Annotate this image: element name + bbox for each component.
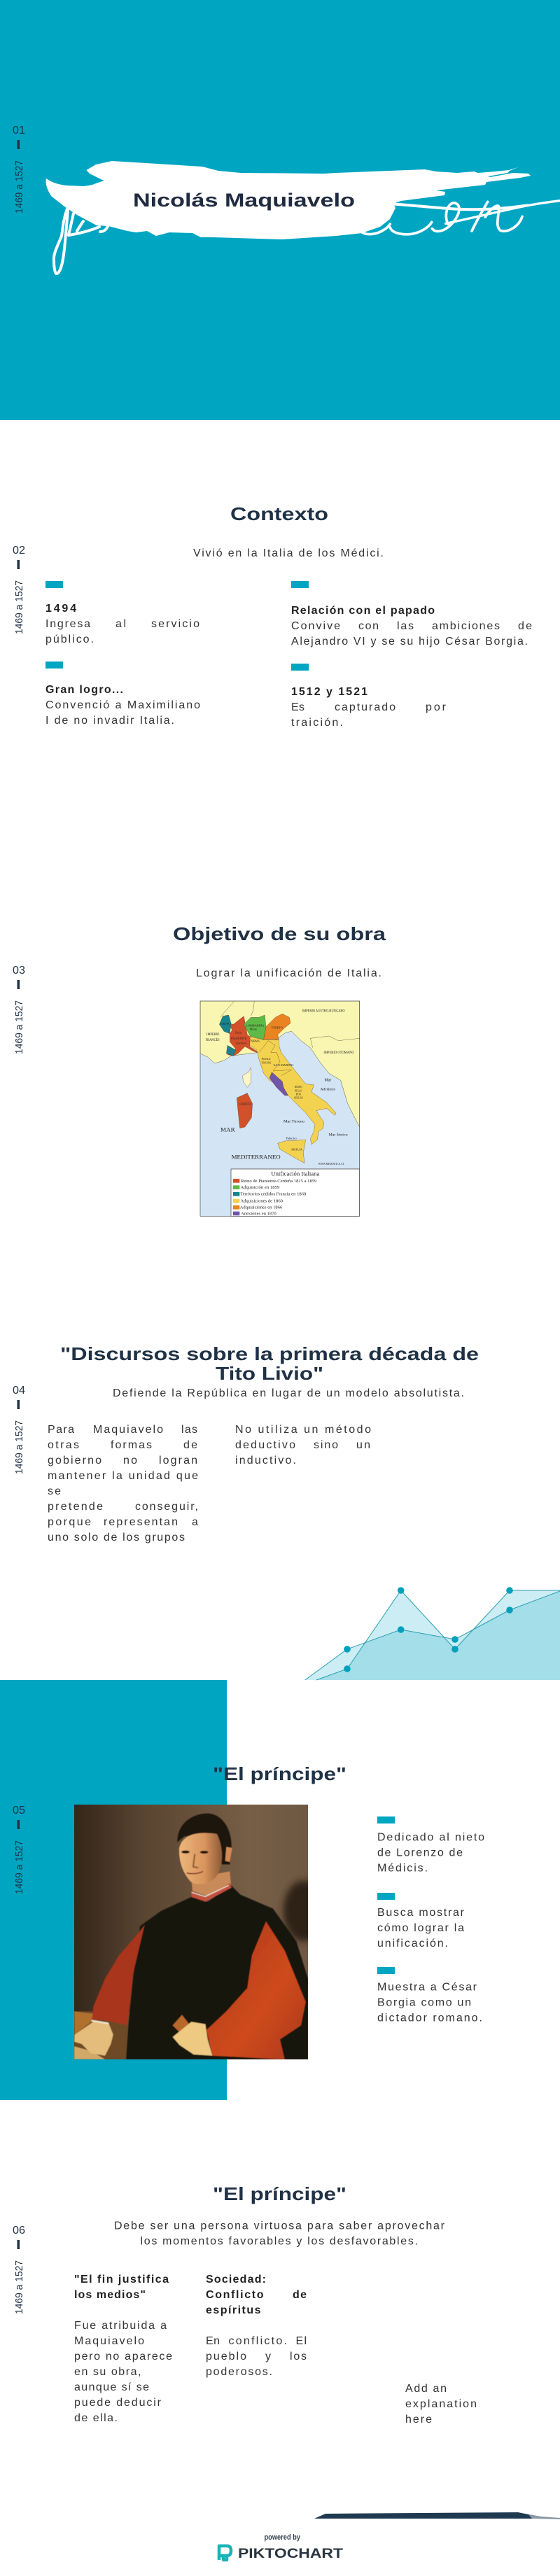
heading: "Discursos sobre la primera década de (60, 1343, 479, 1364)
text block left: formas (111, 1439, 152, 1451)
heading: Contexto (230, 503, 328, 524)
sidebar label 03 (13, 965, 25, 1054)
map labels: WWW.MEDIATICA.CL (318, 1162, 344, 1166)
item: 1494: público. (46, 634, 94, 645)
item: 1512 y 1521: 1512 y 1521 (291, 686, 368, 698)
text block left: no (123, 1455, 137, 1466)
column: el fin justifica los medios: puede deducir (74, 2397, 162, 2409)
item: 1512 y 1521: por (426, 701, 447, 713)
item: gran logro (46, 662, 200, 727)
heading: Tito Livio" (216, 1363, 323, 1384)
sidebar label 05: 05 (13, 1805, 25, 1816)
sidebar label 01 (13, 125, 25, 214)
map legend: Reino de Piamonte-Cerdeña 1815 a 1859 (241, 1179, 316, 1184)
placeholder text: explanation (405, 2398, 477, 2410)
text block left: porque (48, 1516, 91, 1528)
panel: objetivo de su obra (13, 923, 386, 1216)
column: sociedad: conflicto. (228, 2335, 287, 2347)
sidebar label 04 (13, 1385, 25, 1474)
map labels: SICILIAS (294, 1096, 303, 1100)
map labels: SABOYA (220, 1022, 230, 1026)
area chart (305, 1587, 560, 1680)
map labels: Palermo (286, 1136, 297, 1140)
item: 1512 y 1521: Es (291, 701, 304, 713)
black tunic (126, 1885, 308, 2059)
map labels: Adriático (320, 1088, 336, 1091)
text block right: sino (314, 1439, 338, 1451)
panel: el principe (13, 1763, 484, 2059)
item: muestra a cesar (377, 1967, 482, 2024)
right hand (173, 2022, 212, 2056)
text block right (235, 1424, 371, 1466)
text block left: las (181, 1424, 197, 1436)
item: relacion con el papado (291, 581, 532, 648)
text block left: Para (48, 1424, 74, 1436)
map labels: VENETO (271, 1026, 283, 1030)
map labels: REINO (295, 1085, 302, 1088)
item: muestra a cesar: Muestra a César (377, 1981, 477, 1994)
portrait of Machiavelli (74, 1805, 323, 2059)
item: relacion con el papado: Alejandro VI y se su hijo César Borgia. (291, 636, 528, 648)
column: el fin justifica los medios: Fue atribuida a (74, 2320, 167, 2332)
sidebar label 04: 04 (13, 1385, 25, 1396)
left sleeve (92, 1925, 145, 2025)
column: el fin justifica los medios (74, 2274, 172, 2424)
text block left: Maquiavelo (93, 1424, 163, 1436)
heading: "El príncipe" (213, 2183, 346, 2204)
logo icon (219, 2546, 231, 2560)
column: sociedad: poderosos. (206, 2366, 272, 2378)
sidebar label 01: 1469 a 1527 (13, 160, 25, 214)
text block left: a (192, 1516, 198, 1528)
item: dedicado (377, 1816, 484, 1875)
map legend: Territorios cedidos Francia en 1860 (240, 1192, 306, 1197)
item: dedicado: de Lorenzo de (377, 1847, 463, 1859)
text block left: de (183, 1439, 197, 1451)
map legend (231, 1169, 360, 1216)
column: sociedad: En (206, 2335, 220, 2347)
map labels: SICILIA (291, 1147, 303, 1151)
map labels: MAR (220, 1126, 235, 1133)
title text: Nicolás Maquiavelo (133, 190, 355, 211)
sidebar label 06: 06 (13, 2225, 25, 2236)
item: 1494: servicio (151, 618, 200, 630)
item: 1494 (46, 581, 200, 645)
item: 1512 y 1521 (291, 664, 447, 729)
intro text: Lograr la unificación de Italia. (196, 967, 382, 979)
panel: contexto (13, 503, 532, 729)
heading: "El príncipe" (213, 1763, 346, 1784)
column: el fin justifica los medios: aunque sí se (74, 2381, 149, 2393)
column: sociedad (206, 2274, 307, 2378)
map labels: PIAMONTE (231, 1037, 247, 1040)
map labels: SAN MARINO (274, 1063, 293, 1067)
map legend: Unificación Italiana (271, 1170, 320, 1177)
map labels: IMPERIO AUSTRO-HUNGARO (302, 1010, 345, 1014)
map legend: Adquisición en 1859 (240, 1185, 279, 1190)
sidebar label 04: 1469 a 1527 (13, 1420, 25, 1474)
sidebar label 02: 1469 a 1527 (13, 580, 25, 634)
panel: el principe 2 (13, 2183, 477, 2426)
text block right: un (356, 1439, 370, 1451)
map labels: DE LAS (295, 1088, 302, 1092)
map labels: DOS (296, 1092, 301, 1096)
right sleeve (206, 1921, 306, 2059)
book (173, 2015, 190, 2032)
item: 1512 y 1521: traición. (291, 717, 343, 729)
item: relacion con el papado: de (518, 620, 532, 632)
column: sociedad: Sociedad: (206, 2274, 266, 2286)
column: sociedad: los (290, 2351, 307, 2362)
map of Italian unification (200, 1001, 360, 1216)
map labels: LOMBARDIA (246, 1024, 265, 1028)
table (74, 2011, 130, 2059)
item: gran logro: Gran logro... (46, 684, 123, 696)
text block left: uno solo de los grupos (48, 1532, 185, 1544)
script swash right (362, 201, 560, 234)
script swash left (54, 209, 108, 274)
column: el fin justifica los medios: en su obra, (74, 2366, 141, 2378)
column: sociedad: El (295, 2335, 307, 2347)
map labels: Genova (236, 1041, 246, 1044)
sidebar label 03: 1469 a 1527 (13, 1000, 25, 1054)
column: sociedad: de (293, 2289, 307, 2301)
text block left: conseguir, (135, 1501, 198, 1513)
map labels: CERDEÑA (239, 1102, 251, 1106)
item: muestra a cesar: Borgia como un (377, 1996, 471, 2009)
item: muestra a cesar: dictador romano. (377, 2012, 482, 2024)
intro text: Defiende la República en lugar de un modelo absolutista. (113, 1387, 464, 1399)
map labels: TOSCANA (261, 1060, 272, 1064)
panel: discursos (13, 1343, 479, 1544)
hair (177, 1814, 232, 1864)
text block left: representan (104, 1516, 178, 1528)
heading: Objetivo de su obra (173, 923, 386, 944)
item: 1494: al (115, 618, 126, 630)
sidebar label 05 (13, 1805, 25, 1894)
column: el fin justifica los medios: "El fin justifica (74, 2274, 169, 2286)
heading (60, 1343, 479, 1384)
map labels: IMPERIO OTOMANO (323, 1051, 354, 1055)
map legend: Anexiones en 1870 (241, 1211, 276, 1216)
map legend: Adquisiciones en 1866 (240, 1205, 282, 1210)
item: relacion con el papado: ambiciones (432, 620, 500, 632)
item: relacion con el papado: Relación con el papado (291, 605, 435, 617)
footer: powered by: powered by (265, 2533, 301, 2542)
intro text: Vivió en la Italia de los Médici. (193, 547, 384, 559)
column: el fin justifica los medios: Maquiavelo (74, 2335, 144, 2347)
item: busca mostrar (377, 1893, 465, 1949)
map labels: FRANCÉS (206, 1038, 220, 1042)
map labels: PARMA (251, 1039, 260, 1042)
placeholder text: here (405, 2414, 432, 2426)
map labels: Mar Tirreno (284, 1119, 304, 1124)
logo wordmark: PIKTOCHART (238, 2547, 343, 2561)
sidebar label 01: 01 (13, 125, 25, 136)
placeholder text: Add an (405, 2383, 447, 2395)
map labels: Turin (235, 1031, 242, 1035)
column: sociedad: espíritus (206, 2304, 261, 2316)
text block right: deductivo (235, 1439, 295, 1451)
item: dedicado: Dedicado al nieto (377, 1831, 484, 1844)
map labels (206, 1010, 354, 1166)
item: relacion con el papado: las (397, 620, 414, 632)
intro text: Debe ser una persona virtuosa para saber aprovechar (114, 2220, 445, 2232)
text block right: inductivo. (235, 1455, 296, 1466)
sidebar label 02: 02 (13, 545, 25, 556)
text block left: se (48, 1485, 61, 1497)
item: relacion con el papado: Convive (291, 620, 340, 632)
text block left: logran (159, 1455, 197, 1466)
text block left: mantener la unidad que (48, 1470, 198, 1482)
column: sociedad: pueblo (206, 2351, 246, 2362)
text block left: pretende (48, 1501, 103, 1513)
item: relacion con el papado: con (358, 620, 379, 632)
item: gran logro: Convenció a Maximiliano (46, 699, 200, 711)
title artwork: white brush stroke with script swash (46, 161, 560, 274)
item: dedicado: Médicis. (377, 1862, 428, 1875)
text block left (48, 1424, 198, 1544)
column: sociedad: Conflicto (206, 2289, 264, 2301)
map legend: Adquisiciones de 1860 (240, 1199, 283, 1204)
sidebar label 06 (13, 2225, 25, 2314)
item: gran logro: I de no invadir Italia. (46, 715, 174, 727)
text block left: otras (48, 1439, 79, 1451)
sidebar label 05: 1469 a 1527 (13, 1840, 25, 1894)
map labels: IMPERIO (206, 1033, 220, 1037)
sidebar label 02 (13, 545, 25, 634)
sidebar label 03: 03 (13, 965, 25, 976)
text block right: No utiliza un método (235, 1424, 371, 1436)
column: el fin justifica los medios: de ella. (74, 2412, 118, 2424)
placeholder text (405, 2383, 477, 2426)
item: busca mostrar: Busca mostrar (377, 1907, 465, 1919)
face (179, 1833, 222, 1884)
item: 1512 y 1521: capturado (335, 701, 396, 713)
eyes, nose, mouth (181, 1851, 190, 1854)
column: el fin justifica los medios: pero no aparece (74, 2351, 172, 2362)
panel: title background (0, 0, 560, 420)
sidebar label 06: 1469 a 1527 (13, 2260, 25, 2314)
intro text: los momentos favorables y los desfavorables. (140, 2236, 418, 2247)
footer: piktochart logo (219, 2546, 343, 2561)
brush stroke (46, 161, 531, 239)
map labels: Mar (324, 1079, 331, 1083)
item: busca mostrar: cómo lograr la (377, 1922, 464, 1934)
item: 1494: 1494 (46, 603, 76, 615)
neck and collar (191, 1871, 231, 1896)
item: 1494: Ingresa (46, 618, 90, 630)
map labels: Florencia (262, 1057, 270, 1060)
dark brush line (314, 2512, 560, 2519)
column: el fin justifica los medios: los medios" (74, 2289, 146, 2301)
left hand (74, 2022, 113, 2056)
panel: el principe background block (0, 1680, 227, 2100)
map labels: Milan (250, 1028, 257, 1031)
item: busca mostrar: unificación. (377, 1938, 448, 1949)
intro text (114, 2220, 445, 2247)
map labels: Mar Jónico (328, 1133, 348, 1137)
column: sociedad: y (265, 2351, 271, 2362)
map labels: MEDITERRANEO (232, 1153, 281, 1160)
text block left: gobierno (48, 1455, 102, 1466)
